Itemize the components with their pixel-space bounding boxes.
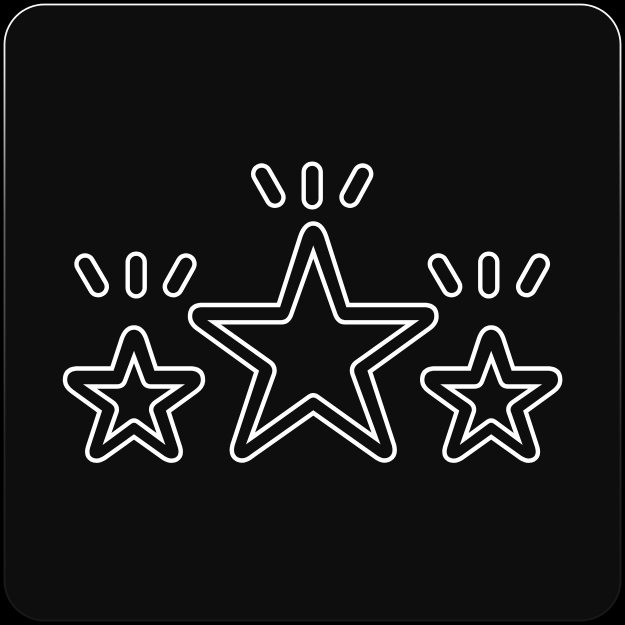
left star middle ray (128, 254, 145, 296)
centre middle ray (304, 164, 321, 207)
centre star inner outline (214, 252, 412, 438)
right star left ray (427, 252, 463, 298)
centre star outer outline (190, 224, 436, 461)
left star right ray (162, 252, 198, 298)
right star outer outline (422, 328, 560, 461)
icon: left star with rays (65, 252, 203, 461)
left star left ray (73, 252, 110, 298)
icon: centre star with rays (190, 162, 436, 461)
centre left ray (250, 162, 287, 209)
centre right ray (338, 162, 374, 209)
right star inner outline (447, 357, 535, 439)
right star right ray (515, 252, 551, 298)
left star inner outline (90, 357, 178, 439)
icon: right star with rays (422, 252, 560, 461)
right star middle ray (480, 254, 497, 296)
left star outer outline (65, 328, 203, 461)
